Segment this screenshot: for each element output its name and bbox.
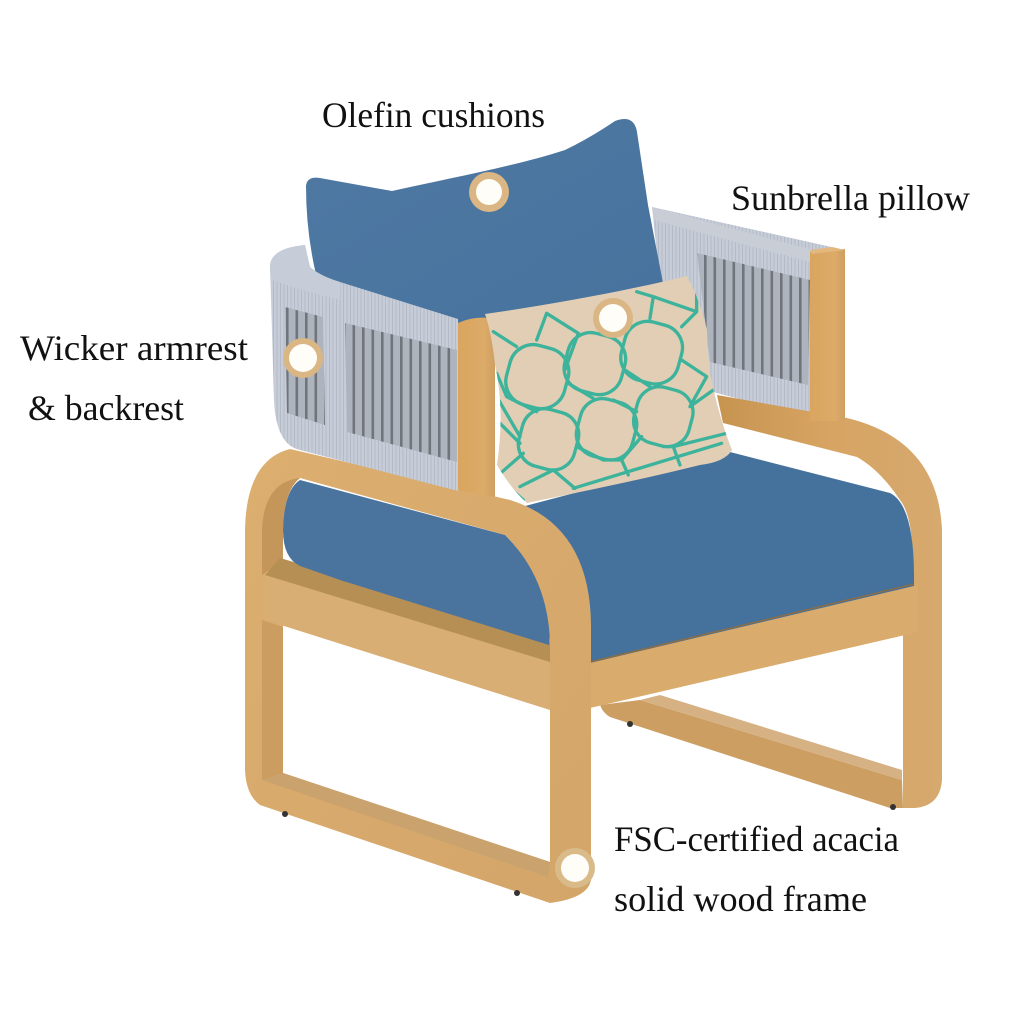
right post: [810, 247, 845, 421]
label: wood frame: solid wood frame: [614, 879, 867, 919]
frame feet: [282, 811, 520, 896]
right arm and rear leg: [717, 395, 942, 808]
right wicker panel: [652, 207, 845, 418]
label: wood frame: FSC-certified acacia: [614, 819, 899, 859]
left post: [458, 318, 495, 497]
label: wicker armrest and backrest: & backrest: [28, 388, 184, 428]
label: wood frame: [614, 819, 899, 919]
patterned pillow: [485, 276, 732, 503]
left rail: [265, 558, 550, 710]
label: sunbrella pillow: Sunbrella pillow: [731, 178, 970, 218]
left wicker panel: [270, 245, 458, 491]
seat cushion right part: [510, 452, 914, 670]
back-right sled rail: [600, 695, 903, 810]
seat cushion left part: [283, 480, 549, 645]
left leg inner face: [262, 620, 283, 780]
pillow teal pattern: [493, 290, 727, 500]
front arm and leg frame: [245, 449, 591, 903]
marker: wicker armrest: [283, 338, 323, 378]
label: wicker armrest and backrest: Wicker armrest: [20, 328, 248, 368]
left panel large slats: [345, 323, 457, 462]
right panel slats: [697, 253, 810, 385]
right panel top rim: [652, 207, 812, 262]
label: olefin cushions: Olefin cushions: [322, 95, 545, 135]
front bottom rail top face: [262, 773, 550, 877]
marker: sunbrella pillow: [593, 298, 633, 338]
marker: olefin cushions: [469, 172, 509, 212]
left arch inner face: [262, 478, 300, 575]
back cushion: [306, 119, 668, 340]
label: wicker armrest and backrest: [20, 328, 248, 428]
left panel rim: [270, 245, 340, 300]
left panel small slats: [285, 307, 325, 425]
chair infographic canvas: [20, 102, 970, 912]
marker: wood frame: [555, 848, 595, 888]
right front rail: [590, 584, 918, 708]
